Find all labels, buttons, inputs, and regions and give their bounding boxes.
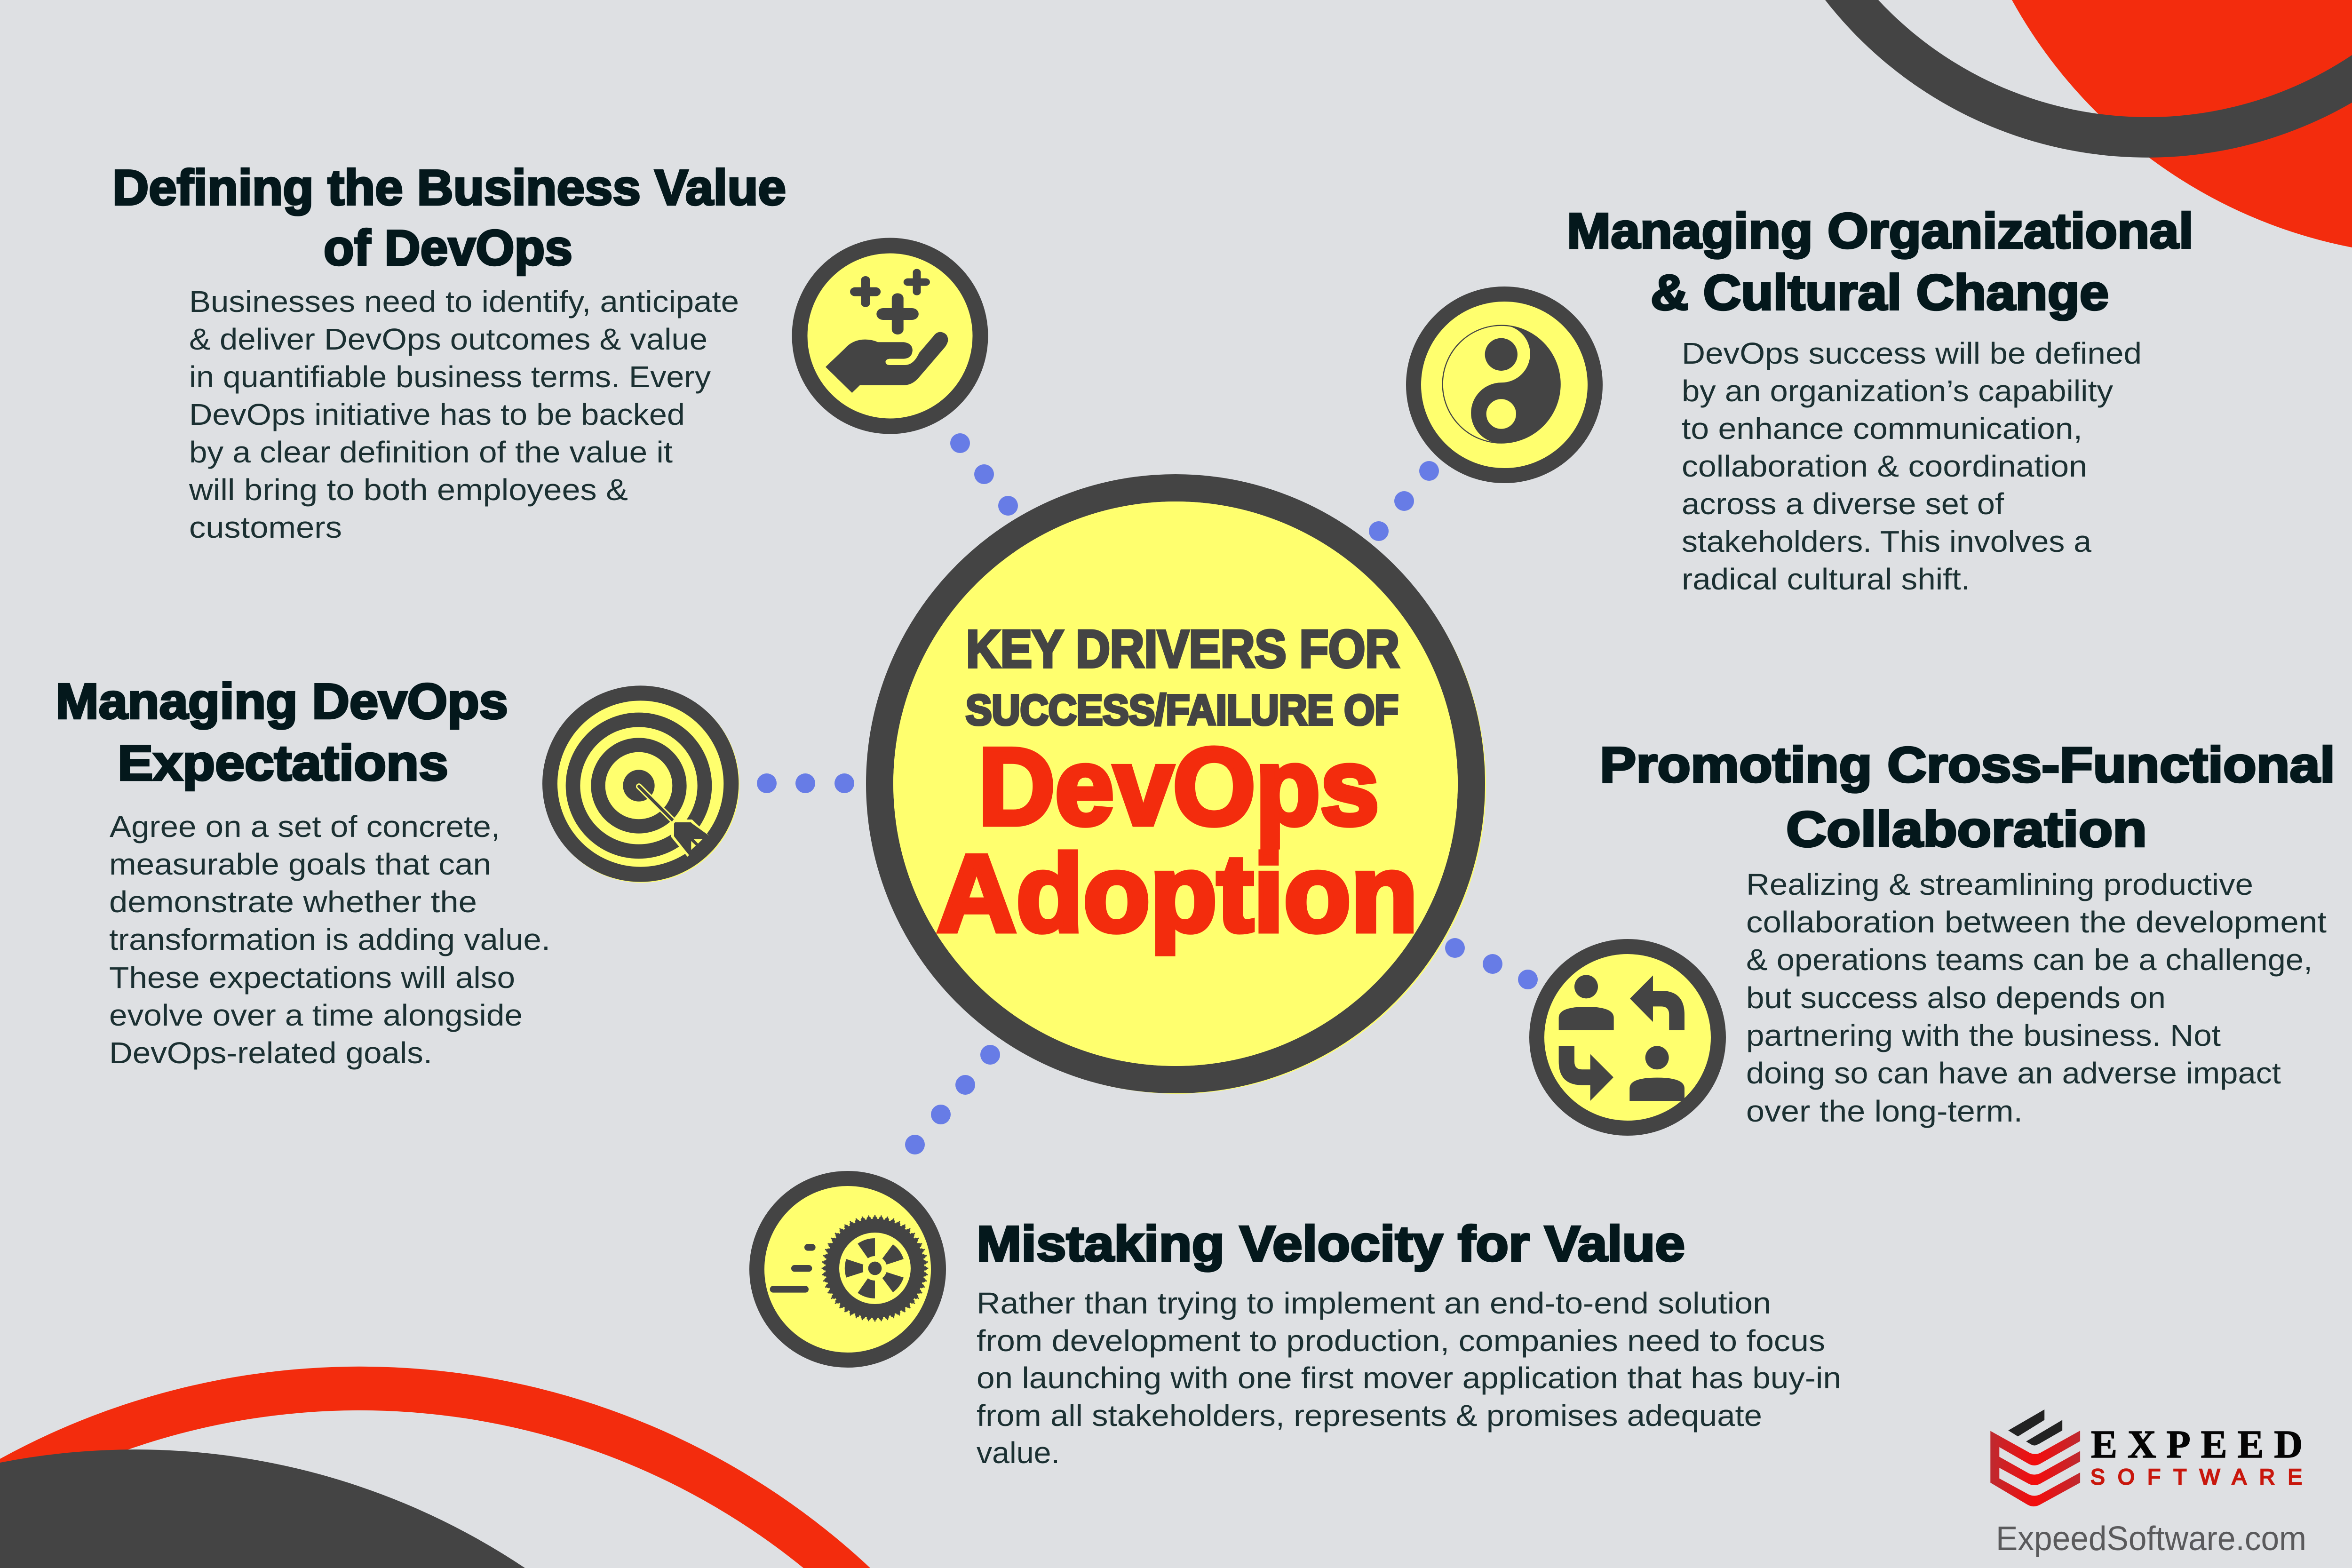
icon: hand with plus signs — [800, 246, 980, 426]
heading: cross-functional collaboration — [1600, 737, 2335, 857]
text block: business value description: customers — [189, 510, 342, 544]
title line: success failure of: SUCCESS/FAILURE OF — [966, 687, 1398, 734]
panel: organizational and cultural change — [1567, 203, 2193, 596]
text block: velocity description — [977, 1286, 1841, 1470]
text block: business value description: by a clear definition of the value it — [189, 435, 673, 469]
title line: DevOps: DevOps — [978, 726, 1379, 848]
text block: expectations description — [109, 810, 550, 1070]
text block: business value description: in quantifiable business terms. Every — [189, 360, 711, 394]
text block: velocity description: value. — [977, 1436, 1060, 1470]
logo wordmark: SOFTWARE: SOFTWARE — [2090, 1465, 2302, 1489]
panel: defining the business value — [112, 160, 786, 544]
text block: business value description — [189, 285, 739, 544]
logo mark: shield chevrons — [1990, 1409, 2080, 1506]
heading: managing devops expectations: Managing DevOps — [56, 674, 508, 729]
text block: expectations description: evolve over a time alongside — [109, 998, 523, 1032]
icon: people exchanging arrows — [1537, 947, 1718, 1128]
connector dots: collaboration — [1445, 938, 1538, 989]
text block: collaboration description — [1746, 868, 2327, 1128]
heading: organizational and cultural change — [1567, 203, 2193, 320]
connector dots: velocity — [905, 1045, 1000, 1154]
text block: collaboration description: doing so can have an adverse impact — [1746, 1056, 2281, 1090]
text block: collaboration description: over the long-term. — [1746, 1094, 2023, 1128]
panel: managing devops expectations — [56, 674, 550, 1070]
text block: collaboration description: partnering with the business. Not — [1746, 1019, 2221, 1052]
heading: defining the business value — [112, 160, 786, 276]
panel: cross-functional collaboration — [1600, 737, 2335, 1128]
text block: cultural change description: by an organization’s capability — [1682, 374, 2113, 408]
text block: expectations description: transformation is adding value. — [109, 923, 550, 956]
heading: managing devops expectations: Expectations — [118, 735, 448, 791]
title line: Adoption: Adoption — [937, 833, 1418, 955]
connector dots: expectations — [757, 773, 854, 793]
website address: ExpeedSoftware.com — [1996, 1520, 2306, 1558]
heading: organizational and cultural change: & Cultural Change — [1651, 265, 2109, 320]
connector dots: cultural change — [1369, 461, 1439, 541]
text block: collaboration description: but success also depends on — [1746, 981, 2166, 1015]
text block: cultural change description: across a diverse set of — [1682, 487, 2004, 521]
text block: expectations description: DevOps-related goals. — [109, 1036, 432, 1070]
text block: cultural change description: radical cultural shift. — [1682, 562, 1970, 596]
text block: velocity description: on launching with one first mover application that has buy-in — [977, 1361, 1841, 1395]
text block: collaboration description: & operations teams can be a challenge, — [1746, 943, 2312, 977]
logo: Expeed Software — [1990, 1409, 2306, 1558]
text block: velocity description: from development to production, companies need to focus — [977, 1324, 1825, 1358]
text block: collaboration description: collaboration between the development — [1746, 905, 2327, 939]
connector dots: business value — [950, 433, 1018, 516]
text block: cultural change description: collaboration & coordination — [1682, 449, 2087, 483]
heading: organizational and cultural change: Managing Organizational — [1567, 203, 2193, 259]
heading: defining the business value: of DevOps — [324, 220, 572, 276]
panel: mistaking velocity for value — [977, 1216, 1841, 1470]
text block: expectations description: Agree on a set of concrete, — [110, 810, 500, 844]
heading: managing devops expectations — [56, 674, 508, 791]
text block: cultural change description: DevOps success will be defined — [1682, 336, 2142, 370]
text block: cultural change description — [1682, 336, 2142, 596]
text block: business value description: Businesses need to identify, anticipate — [189, 285, 739, 318]
text block: velocity description: from all stakeholders, represents & promises adequate — [977, 1399, 1762, 1433]
logo wordmark: EXPEED: EXPEED — [2091, 1423, 2303, 1466]
decoration: bottom left red ring and dark circle — [0, 1367, 870, 1568]
heading: cross-functional collaboration: Promoting Cross-Functional — [1600, 737, 2335, 793]
icon: target with arrow — [542, 685, 739, 883]
text block: expectations description: measurable goals that can — [109, 847, 491, 881]
text block: business value description: will bring to both employees & — [189, 473, 628, 507]
heading: mistaking velocity for value: Mistaking Velocity for Value — [977, 1216, 1685, 1272]
text block: business value description: DevOps initiative has to be backed — [189, 398, 685, 431]
text block: expectations description: These expectations will also — [109, 961, 515, 995]
heading: cross-functional collaboration: Collaboration — [1786, 802, 2147, 857]
text block: velocity description: Rather than trying to implement an end-to-end solution — [977, 1286, 1771, 1320]
central circle with title — [869, 477, 1486, 1094]
text block: collaboration description: Realizing & streamlining productive — [1746, 868, 2253, 901]
text block: cultural change description: to enhance communication, — [1682, 412, 2082, 446]
heading: defining the business value: Defining the Business Value — [112, 160, 786, 215]
text block: business value description: & deliver DevOps outcomes & value — [189, 322, 707, 356]
text block: cultural change description: stakeholders. This involves a — [1682, 525, 2091, 558]
decoration: top right red circle and dark ring — [1825, 0, 2352, 247]
icon: speeding wheel — [757, 1178, 938, 1360]
icon: yin yang — [1414, 294, 1595, 476]
text block: expectations description: demonstrate whether the — [109, 885, 477, 919]
title line: key drivers for: KEY DRIVERS FOR — [966, 620, 1399, 678]
